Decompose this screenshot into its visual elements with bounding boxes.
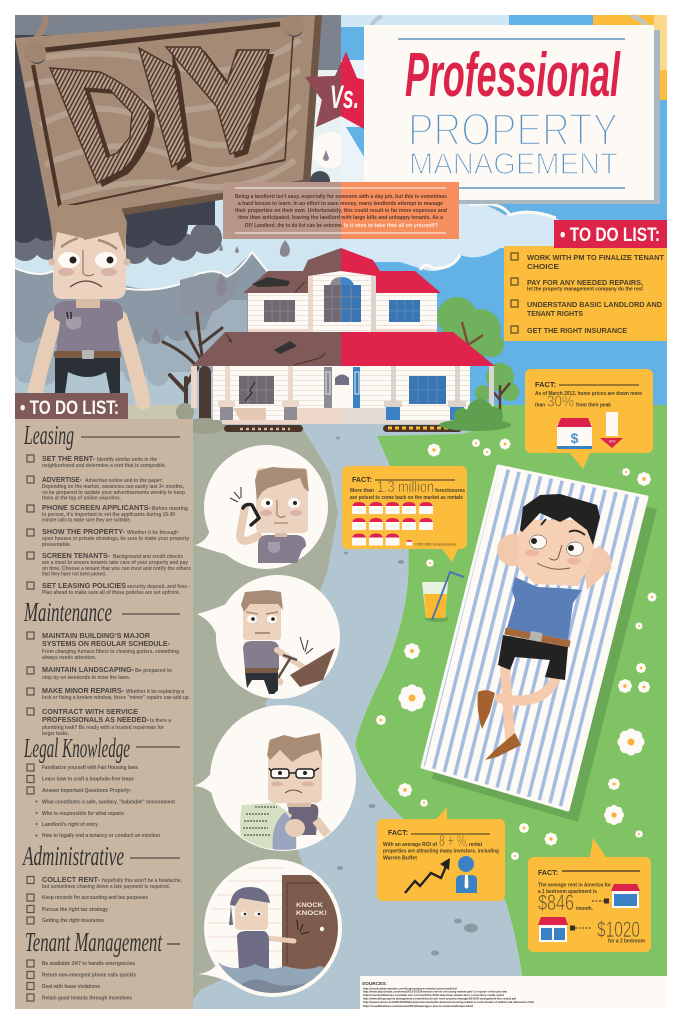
leasing section: presentable. <box>42 542 72 548</box>
eyes <box>530 519 585 556</box>
shorts <box>498 635 568 680</box>
DIY letters <box>50 47 274 187</box>
left pale ground strip <box>128 405 188 420</box>
tenant management section: Deal with lease violations <box>42 984 100 990</box>
upper roof <box>243 248 441 293</box>
fact: foreclosures: 1.3 million <box>377 479 434 496</box>
property heading: PROPERTY <box>408 104 618 155</box>
maintenance section: Maintenance <box>23 597 112 627</box>
belt <box>54 351 121 358</box>
hair <box>50 205 127 252</box>
fact: rent <box>528 838 651 952</box>
driveway path <box>193 405 522 1009</box>
legal knowledge section: Legal Knowledge <box>23 733 130 763</box>
professional to do list: • TO DO LIST: <box>560 225 660 246</box>
leasing section: open houses or private showings, be sure to make your property <box>42 536 189 542</box>
ground floor walls <box>213 365 470 420</box>
maintenance section: From changing furnace filters to cleaning gutters, something <box>42 649 179 655</box>
stepping stones <box>336 436 478 956</box>
sources: http://www.nytimes.com/2012/04/05/business/economy/the-american-housing-market-is-in-the-hands-of-buffett-and-billionaires.html <box>363 1000 534 1004</box>
leasing section: Whether it be through <box>127 530 178 536</box>
legal knowledge section: How to legally end a tenancy or conduct an eviction <box>42 833 160 839</box>
administrative section: Keep records for accounting and tax purposes <box>42 895 148 901</box>
fact: home prices: 30% <box>547 394 574 410</box>
arms <box>497 534 612 590</box>
sources: http://smcdi.wikiproperties.com/blog/creating-a-rental-property-landlord/ <box>363 986 457 990</box>
trousers <box>55 358 120 393</box>
fact: foreclosures: More than <box>350 488 374 494</box>
bubble: repairs <box>197 575 340 699</box>
fact: foreclosures: =200,000 foreclosures <box>414 542 456 546</box>
maintenance section <box>23 597 191 737</box>
fact: ROI: 8 + % <box>439 833 466 850</box>
leasing section: PHONE SCREEN APPLICANTS- <box>42 503 152 512</box>
fact: foreclosures <box>342 466 467 562</box>
sources: SOURCES: <box>362 981 388 986</box>
professional to do list: GET THE RIGHT INSURANCE <box>527 326 627 335</box>
professional to do list: let the property management company do the rest <box>527 286 643 292</box>
leasing section: security deposit, and fees - <box>127 584 190 590</box>
tenant management section: Tenant Management <box>25 927 163 957</box>
maintenance section: Be prepared to <box>135 668 172 674</box>
sign shadow <box>368 30 660 204</box>
maintenance section: stop by on weekends to mow the lawn. <box>42 675 131 681</box>
fact: rent: /month. <box>576 906 593 912</box>
maintenance section: MAINTAIN LANDSCAPING- <box>42 665 135 674</box>
glass of juice <box>422 572 464 622</box>
sources: http://smcdi.allthemes.com/bah.cnn.com/rent/the-2012-american-dream-here-s-how-they-really-spent <box>363 993 504 997</box>
fact: rent: $846 <box>538 890 574 915</box>
fact: home prices: As of March 2012, home prices are down more <box>535 391 642 397</box>
leasing section: neighborhood and determine a rent that is comprable. <box>42 463 167 469</box>
professional to do list: TENANT RIGHTS <box>527 309 583 318</box>
professional sign <box>364 16 660 204</box>
belt <box>505 631 570 644</box>
leasing section: Identify similar units in the <box>97 457 157 463</box>
fact: foreclosures: foreclosures <box>435 488 465 494</box>
professional to do list: PAY FOR ANY NEEDED REPAIRS, <box>527 278 643 287</box>
wood grain <box>25 40 300 200</box>
icon: rising arrow <box>405 858 450 893</box>
maintenance section: always needs attention. <box>42 655 97 661</box>
upper storey <box>248 293 437 333</box>
leasing section: Before meeting <box>152 506 188 512</box>
columns <box>191 366 494 420</box>
fact: ROI: , rental <box>466 842 482 848</box>
shoes <box>478 690 521 760</box>
leasing section: in person, it's important to vet the applicants during 15-30 <box>42 512 175 518</box>
foreclosure house icons <box>352 502 433 546</box>
maintenance section: CONTRACT WITH SERVICE <box>42 707 138 716</box>
shirt <box>507 577 582 640</box>
head <box>517 520 597 586</box>
professional to do list: UNDERSTAND BASIC LANDLORD AND <box>527 300 663 309</box>
sources: http://www.alltopproperty-management.com/articles/do-you-need-property-manager/2012/03-management-fees-article.pdf <box>363 996 516 1000</box>
bubble: phone call <box>195 445 328 569</box>
maintenance section: MAKE MINOR REPAIRS- <box>42 686 125 695</box>
leasing section <box>23 420 191 596</box>
panel: DIY to do list <box>15 393 193 1009</box>
shirt <box>54 301 123 354</box>
leasing section: on time. Choose a tenant that you can trust and notify the others <box>42 566 191 572</box>
left ground <box>128 405 338 1000</box>
fact: rent: The average rent in America for <box>538 882 612 888</box>
arms <box>34 318 143 402</box>
tenant <box>265 938 294 941</box>
leasing section: Leasing <box>23 420 74 450</box>
broken steps <box>233 408 266 420</box>
maintenance section: lock or fixing a broken window, these "minor" repairs can add up. <box>42 695 191 701</box>
intro text box: a hard lesson to learn. In an effort to save money, many landlords attempt to manage <box>238 201 443 207</box>
bubble: tenant knocking <box>197 859 352 1000</box>
fact: foreclosures: FACT: <box>352 475 372 484</box>
leasing section: SET THE RENT- <box>42 454 96 463</box>
intro text box: their properties on their own. Unfortunately, this could result in far more expenses and <box>235 208 447 214</box>
administrative section: but sometimes chasing down a late payment is required. <box>42 884 171 890</box>
lawn <box>341 405 667 976</box>
vs lettering: Vs. <box>330 79 359 115</box>
porch base <box>222 420 342 424</box>
sources <box>360 976 667 1008</box>
smile <box>537 545 570 569</box>
maintenance section: Is there a <box>150 718 171 724</box>
fact: home prices: FACT: <box>535 380 556 389</box>
professional to do list <box>504 220 667 341</box>
hammer <box>278 655 297 678</box>
broken board <box>290 648 335 687</box>
administrative section <box>22 841 183 924</box>
neck <box>76 295 100 308</box>
administrative section: Getting the right insurance <box>42 918 104 924</box>
intro text box: Being a landlord isn't easy, especially for someone with a day job, but this is sometimes <box>235 194 447 200</box>
fact: ROI <box>377 807 505 901</box>
lower roof <box>192 332 495 366</box>
fact: ROI: FACT: <box>388 828 408 837</box>
flowers <box>376 438 656 860</box>
board <box>364 25 654 200</box>
intro text box: Is it wise to take that all on yourself? <box>344 223 438 229</box>
management heading: MANAGEMENT <box>409 146 618 181</box>
fact: home prices: from their peak <box>576 402 611 408</box>
fact: foreclosures: are poised to come back on the market as rentals <box>350 495 463 501</box>
fact: home prices <box>525 369 653 469</box>
knock label: KNOCK <box>296 902 323 909</box>
door <box>324 367 360 408</box>
maintenance section: larger tasks. <box>42 731 69 737</box>
icon: investor <box>456 856 477 893</box>
icon: house with dollar: $ <box>571 430 579 446</box>
DIY wooden sign <box>15 15 322 225</box>
bush front right <box>439 399 511 431</box>
rule lines <box>398 39 625 188</box>
legal knowledge section: Answer Important Questions Properly: <box>42 788 131 794</box>
legal knowledge section <box>23 733 180 839</box>
fact: ROI: properties are attracting many investors, including <box>383 848 499 854</box>
lower windows <box>239 376 446 404</box>
hair <box>520 494 600 545</box>
leasing section: Plan ahead to make sure all of these policies are set upfront. <box>42 590 181 596</box>
administrative section: Administrative <box>22 841 124 871</box>
tenant management section: Return non-emergent phone calls quickly <box>42 972 136 978</box>
fact: rent: a 1 bedroom apartment is <box>538 889 597 895</box>
fact: ROI: Warren Buffet <box>383 856 417 862</box>
maintenance section: plumbing leak? Be ready with a trusted repairman for <box>42 725 164 731</box>
upper windows <box>264 300 420 322</box>
tenant management section: Be available 24/7 to handle emergencies <box>42 961 135 967</box>
towel <box>422 466 657 822</box>
fact: ROI: With an average ROI of <box>383 842 437 848</box>
legal knowledge section: Landlord's right of entry <box>42 822 98 828</box>
rings <box>371 16 647 41</box>
legal knowledge section: What constitutes a safe, sanitary, "habitable" environment <box>42 800 175 806</box>
intro text box <box>223 182 459 239</box>
maintenance section: PROFESSIONALS AS NEEDED- <box>42 715 150 724</box>
face details <box>58 250 117 287</box>
relaxing man <box>478 494 612 760</box>
sources: http://www.bizjournals.com/news/2012/10/22/investors-are-in-a-housing-market-part-1-a-square-of-the-pie.html <box>363 990 507 994</box>
nails <box>24 15 303 64</box>
icon: 2 bedroom house <box>538 917 568 942</box>
bubble: tenant knocking: KNOCK! <box>296 910 327 917</box>
leasing section: minute calls to make sure they are suitable. <box>42 518 131 524</box>
leasing section: are a must to ensure tenants take care of your property and pay <box>42 560 188 566</box>
leasing section: Background and credit checks <box>113 554 183 560</box>
icon: 1 bedroom house <box>611 884 640 908</box>
DIY landlord figure <box>34 205 143 402</box>
vs star <box>305 52 385 130</box>
legal knowledge section: Learn how to craft a loophole-free lease <box>42 776 134 782</box>
panel: DIY to do list: • TO DO LIST: <box>20 398 119 419</box>
fact: rent: FACT: <box>538 868 558 877</box>
intro text box: time than anticipated, leaving the landlord with large bills and unhappy tenants. As a <box>238 215 444 221</box>
maintenance section: SYSTEMS ON REGULAR SCHEDULE- <box>42 639 171 648</box>
tenant management section <box>25 927 180 1002</box>
leasing section: SHOW THE PROPERTY- <box>42 527 126 536</box>
maintenance section: MAINTAIN BUILDING'S MAJOR <box>42 631 151 640</box>
icon: down arrow 30%: 30% <box>609 440 615 444</box>
sign frame <box>33 24 293 207</box>
leasing section: Advertise online and in the paper: <box>85 478 163 484</box>
bubble: paperwork <box>194 705 356 851</box>
sources: http://seattletimes.com/news/2012/average-rent-in-america/index.html <box>363 1004 473 1008</box>
leasing section: that they have not been picked. <box>42 572 106 578</box>
administrative section: hopefully this won't be a headache, <box>102 878 183 884</box>
fact: home prices: than <box>535 402 545 408</box>
eyes <box>58 238 117 268</box>
rope <box>32 15 46 42</box>
intro text box: DIY Landlord, the to do list can be extreme. <box>245 223 343 229</box>
door <box>282 875 338 975</box>
bare tree <box>163 313 222 420</box>
leasing section: them at the top of online searches. <box>42 496 122 502</box>
flower beds <box>224 425 462 432</box>
leasing section: SET LEASING POLICIES <box>42 581 126 590</box>
trees right of house <box>437 297 519 416</box>
administrative section: COLLECT RENT- <box>42 875 101 884</box>
rain drops <box>152 150 329 344</box>
professional to do list: WORK WITH PM TO FINALIZE TENANT <box>527 253 664 262</box>
sign shadow <box>15 15 322 225</box>
background: sunny sky <box>341 15 667 415</box>
leasing section: so be prepared to update your advertisements weekly to keep <box>42 490 185 496</box>
administrative section: Pursue the right tax strategy <box>42 907 108 913</box>
leasing section: ADVERTISE- <box>42 475 83 484</box>
flood water <box>218 962 324 993</box>
bushes left <box>176 403 225 434</box>
leasing section: SCREEN TENANTS- <box>42 551 111 560</box>
house <box>191 248 495 432</box>
legal knowledge section: Familiarize yourself with Fair Housing laws <box>42 765 138 771</box>
maintenance section: Whether it be replacing a <box>126 689 184 695</box>
professional to do list: CHOICE <box>527 262 559 271</box>
phone <box>243 504 259 525</box>
fact: rent: for a 2 bedroom <box>608 938 645 944</box>
head <box>53 220 126 299</box>
tenant management section: Retain good tenants through incentives <box>42 996 132 1002</box>
background: stormy sky <box>9 15 348 420</box>
glasses <box>269 768 319 778</box>
leasing section: Depending on the market, vacancies can easily last 3+ months, <box>42 484 185 490</box>
legal knowledge section: Who is responsible for what repairs <box>42 811 124 817</box>
fact: rent: $1020 <box>597 917 640 942</box>
crossed legs <box>500 668 555 737</box>
board <box>15 15 315 220</box>
dormer <box>308 271 376 338</box>
